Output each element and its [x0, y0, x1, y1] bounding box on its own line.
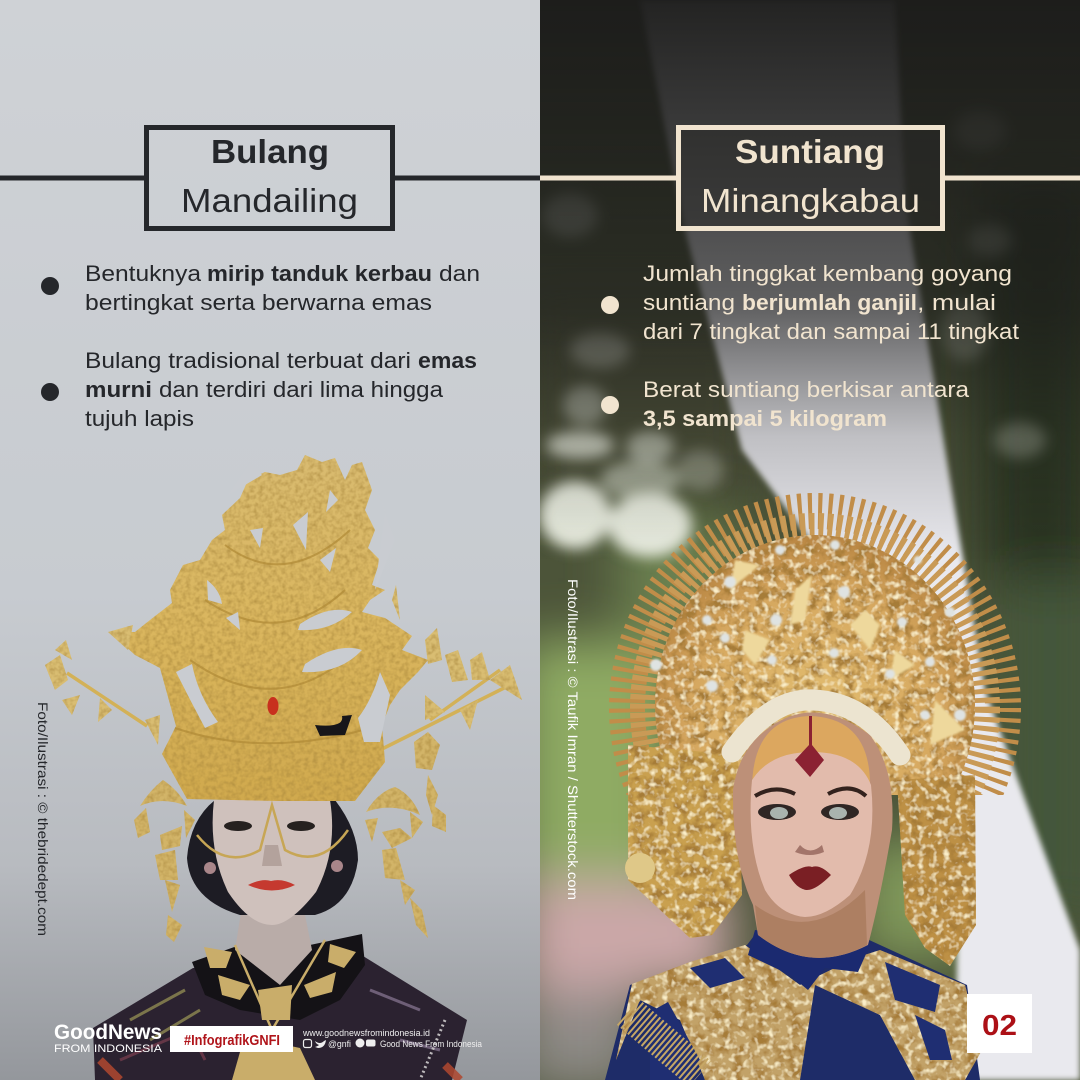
lips: [248, 880, 295, 890]
rhinestone clusters: [650, 540, 966, 721]
inner orange scarf: [752, 716, 870, 790]
right bullet 1: [601, 261, 1019, 344]
social links: Good News From Indonesia: [380, 1039, 482, 1049]
crown tier shading: [175, 530, 380, 743]
left bullet 2: murni: [85, 377, 152, 402]
fringe: [628, 1012, 700, 1074]
right tassels: [897, 775, 976, 966]
left bullet 2: emas: [418, 348, 477, 373]
figure: Minangkabau bride with suntiang crown: [605, 511, 1003, 1080]
flower wreath: [732, 700, 900, 755]
gold leaves on crown and branches: [45, 585, 522, 745]
left bullet 1: dan: [439, 261, 480, 286]
eyes: [224, 821, 315, 831]
figure: Mandailing bride with bulang crown: [45, 455, 522, 1080]
left bullet 2: tujuh lapis: [85, 406, 194, 431]
neck wrap: [755, 890, 867, 958]
dark hair behind crown: [315, 715, 352, 736]
left bullet 2: dan terdiri dari lima hingga: [159, 377, 444, 402]
ulos pattern: [100, 990, 460, 1080]
social links: @gnfi: [328, 1039, 351, 1049]
right bullet 1: suntiang: [643, 290, 735, 315]
right bullet 1: dari 7 tingkat dan sampai 11 tingkat: [643, 319, 1019, 344]
title box: Bulang Mandailing: Mandailing: [181, 182, 358, 219]
lips: [789, 866, 831, 890]
left bullet 2: Bulang tradisional terbuat dari: [85, 348, 411, 373]
gold embroidered shoulders: [616, 945, 982, 1080]
crown openings: [176, 462, 395, 742]
red gem: [268, 697, 278, 715]
left tassels: [628, 745, 742, 938]
page number badge: [967, 994, 1032, 1053]
highlights: [730, 560, 965, 745]
eyes and brows: [755, 788, 866, 820]
side rods: [67, 670, 510, 750]
nose shadow: [262, 845, 282, 866]
face: [751, 752, 872, 917]
right bullet 2: [601, 377, 970, 431]
left bullet 2: [41, 348, 477, 431]
forehead jewel: [795, 716, 824, 777]
title box: Bulang Mandailing: [0, 128, 540, 228]
dark top overlay: [540, 0, 1080, 560]
social links: www.goodnewsfromindonesia.id: [302, 1028, 430, 1038]
hair: [187, 800, 358, 915]
right bullet 1: Jumlah tinggkat kembang goyang: [643, 261, 1012, 286]
right bullet 1: , mulai: [917, 290, 996, 315]
face: [213, 800, 332, 925]
earrings: [204, 860, 343, 874]
halo body: [655, 535, 975, 795]
logo: GoodNews from Indonesia: [54, 1021, 163, 1055]
icon: twitter: [315, 1040, 326, 1048]
title box: Suntiang Minangkabau: Minangkabau: [701, 182, 920, 219]
logo: GoodNews from Indonesia: FROM INDONESIA: [54, 1043, 163, 1055]
neck collar: [748, 930, 870, 990]
necklace and chest ornaments: [204, 940, 356, 1080]
right bullet 1: berjumlah ganjil: [742, 290, 917, 315]
social links: [302, 1028, 482, 1049]
icon: facebook: [356, 1038, 364, 1048]
neck: [235, 915, 312, 985]
title box: Suntiang Minangkabau: [540, 128, 1080, 228]
page number badge: 02: [982, 1010, 1017, 1042]
velvet panels: [650, 958, 952, 1080]
title box: Suntiang Minangkabau: Suntiang: [735, 133, 885, 170]
right hanging ornaments: [365, 732, 446, 938]
photo credit: left: Foto/Ilustrasi : © thebridedept.com: [35, 702, 51, 936]
left bullet 1: mirip tanduk kerbau: [207, 261, 432, 286]
spikes outer: [609, 493, 1021, 795]
logo: GoodNews from Indonesia: GoodNews: [54, 1021, 162, 1044]
left bullet 1: bertingkat serta berwarna emas: [85, 290, 432, 315]
white drape: [640, 0, 1080, 1080]
photo credit: right: Foto/Ilustrasi : © Taufik Imran / Shutterstock.com: [565, 579, 581, 900]
body with ulos cloth: [93, 956, 467, 1080]
left round pendant: [625, 853, 655, 883]
right bullet 2: Berat suntiang berkisar antara: [643, 377, 970, 402]
right bullet 2: 3,5 sampai 5 kilogram: [643, 406, 887, 431]
crown silhouette: [110, 455, 428, 801]
title box: Bulang Mandailing: Bulang: [211, 133, 329, 170]
panel: left background: [0, 0, 540, 1080]
panel: right photo background: [520, 0, 1080, 1080]
suntiang crown halo: [609, 493, 1021, 795]
hashtag badge: [170, 1026, 293, 1052]
nose: [795, 845, 824, 855]
left hanging ornaments: [134, 780, 195, 942]
icon: instagram: [304, 1040, 312, 1048]
left bullet 1: [41, 261, 480, 315]
hashtag badge: #InfografikGNFI: [184, 1033, 280, 1049]
spikes inner: [630, 513, 1000, 795]
hijab: [733, 712, 893, 958]
face chain: [197, 805, 348, 857]
blue dress: [605, 928, 980, 1080]
black collar: [192, 934, 365, 1020]
left bullet 1: Bentuknya: [85, 261, 202, 286]
icon: youtube: [366, 1040, 376, 1046]
